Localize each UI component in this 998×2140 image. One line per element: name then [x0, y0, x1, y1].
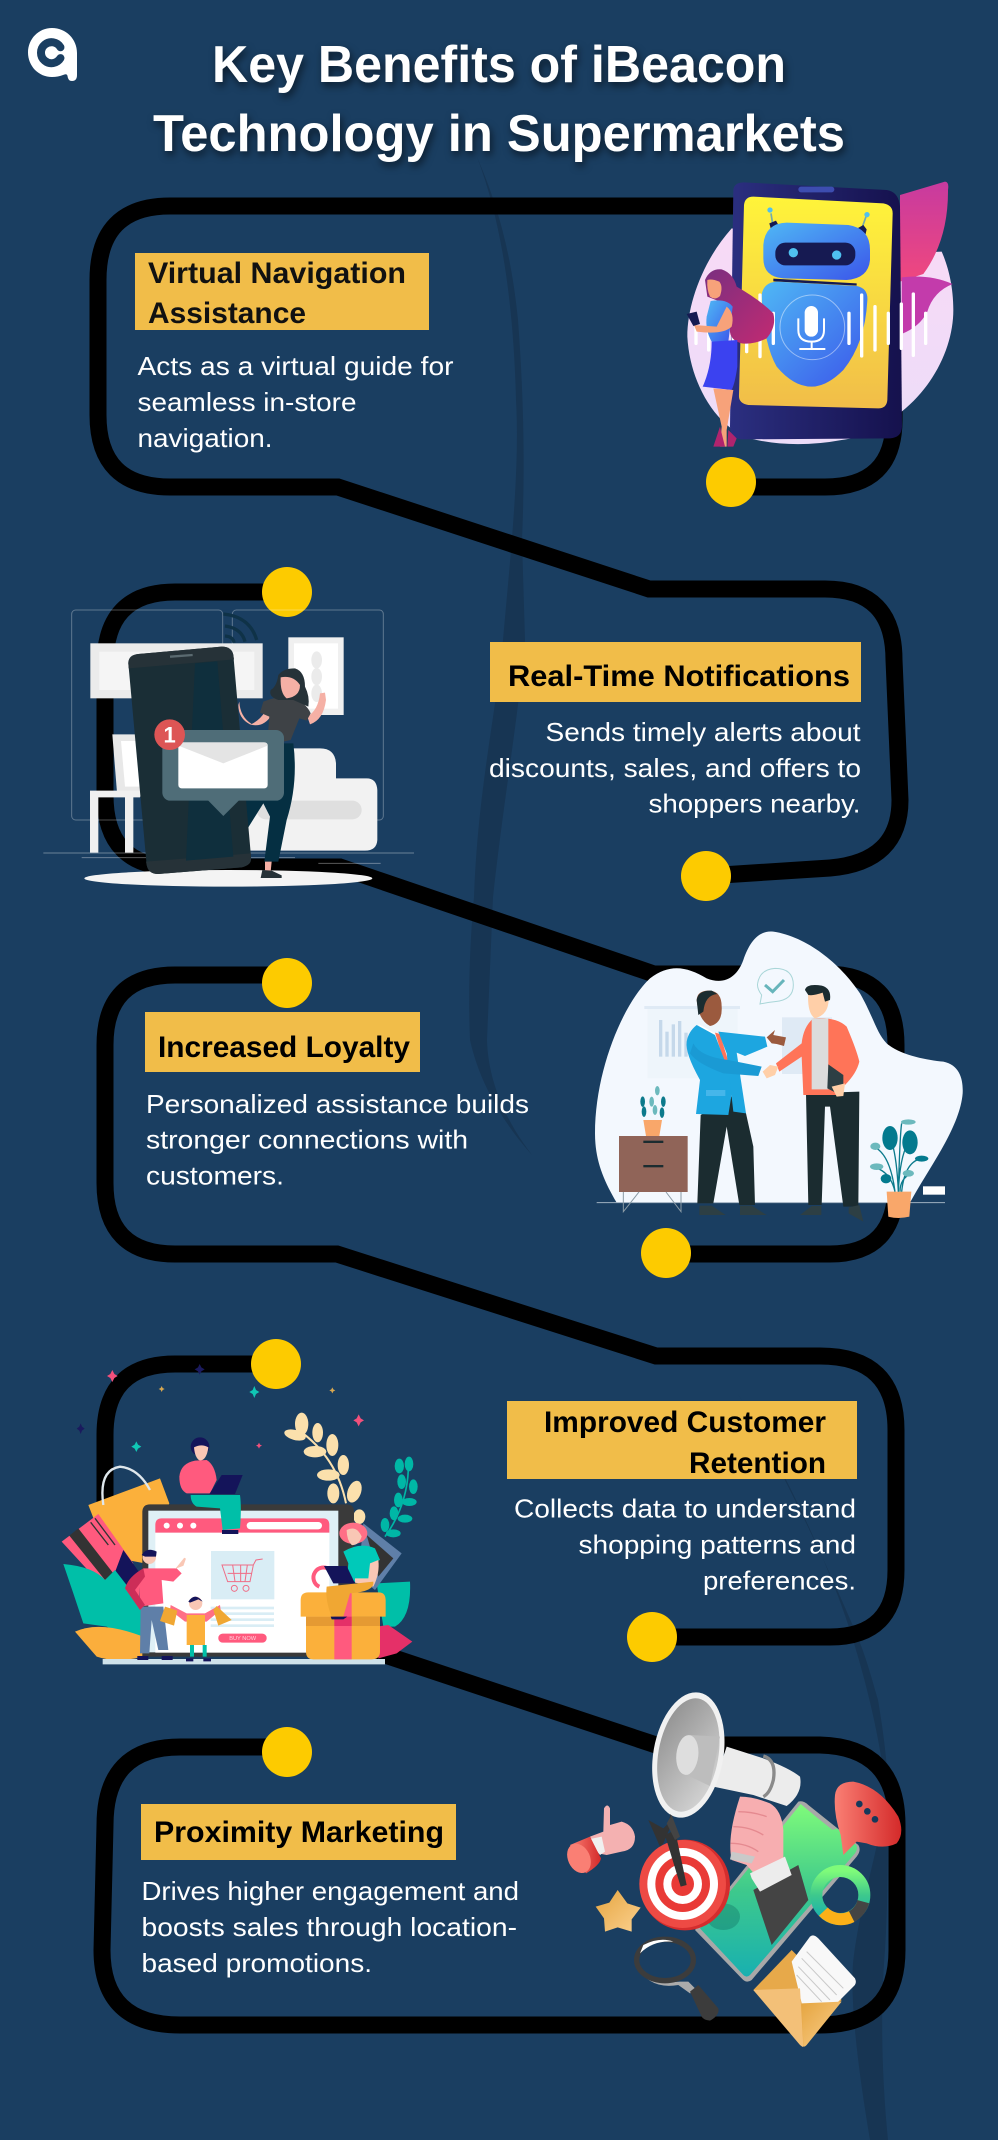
panel: virtual navigation assistance: Acts as a virtual guide for: [138, 351, 454, 381]
panel: real-time notifications: discounts, sales, and offers to: [489, 753, 861, 783]
panel: proximity marketing: Drives higher engagement and: [142, 1876, 519, 1906]
donut chart: [816, 1871, 864, 1919]
child with bags: [160, 1597, 232, 1661]
logo: [28, 28, 77, 81]
star: [596, 1890, 641, 1932]
panel: proximity marketing: [141, 1804, 519, 1978]
panel: improved customer retention: Retention: [689, 1447, 826, 1480]
target and dart: [639, 1814, 730, 1930]
panel: virtual navigation assistance: Assistance: [148, 297, 306, 330]
thumbs up: [563, 1805, 635, 1877]
panel: real-time notifications: shoppers nearby.: [648, 788, 860, 818]
panel: real-time notifications: Real-Time Notifications: [508, 660, 850, 693]
panel: real-time notifications: Sends timely alerts about: [546, 717, 861, 747]
illustration: phone notification and woman: [43, 610, 414, 887]
megaphone: [643, 1687, 801, 1823]
magnifying glass: [637, 1939, 719, 2021]
connector: path from loyalty panel to retention panel: [105, 975, 896, 1637]
panel: virtual navigation assistance: [135, 253, 454, 453]
panel: improved customer retention: Collects data to understand: [514, 1494, 856, 1524]
man waving: [125, 1550, 185, 1660]
panel: improved customer retention: shopping patterns and: [578, 1530, 856, 1560]
panel: increased loyalty: Increased Loyalty: [158, 1031, 410, 1064]
red speech bubble: [835, 1782, 901, 1855]
panel: increased loyalty: stronger connections with: [146, 1124, 468, 1154]
illustration: marketing megaphone and icons: [563, 1687, 901, 2047]
phone with green screen: [695, 1801, 860, 1982]
panel: proximity marketing: based promotions.: [142, 1948, 372, 1978]
panel: improved customer retention: [507, 1401, 857, 1596]
title: Technology in Supermarkets: [153, 105, 845, 163]
title: Key Benefits of iBeacon: [212, 36, 786, 94]
connector: path from retention panel to marketing panel: [102, 1364, 897, 2025]
illustration: phone notification and woman: 1: [164, 723, 176, 748]
connector: black path from panel 1 to notifications panel: [98, 206, 900, 876]
panel: improved customer retention: Improved Customer: [544, 1406, 826, 1439]
connector: panel 1 lower right arc: [731, 380, 894, 487]
yellow connector dots: [251, 457, 756, 1777]
panel: proximity marketing: boosts sales through location-: [142, 1912, 517, 1942]
panel: increased loyalty: [145, 1012, 529, 1190]
connector: path from notifications panel to loyalty panel: [105, 592, 896, 1254]
illustration: business handshake: [595, 931, 963, 1222]
illustration: online shopping laptop: BUY NOW: [229, 1636, 257, 1642]
fist holding megaphone: [730, 1797, 792, 1892]
panel: proximity marketing: Proximity Marketing: [154, 1816, 444, 1849]
man sitting with laptop on screen: [179, 1437, 243, 1534]
panel: virtual navigation assistance: seamless in-store: [138, 387, 356, 417]
panel: improved customer retention: preferences.: [703, 1566, 856, 1596]
panel: increased loyalty: Personalized assistance builds: [146, 1089, 529, 1119]
panel: increased loyalty: customers.: [146, 1160, 284, 1190]
illustration: robot voice assistant on phone: [687, 182, 953, 447]
panel: virtual navigation assistance: navigation.: [138, 423, 272, 453]
title: [153, 36, 845, 163]
illustration: online shopping laptop: [62, 1364, 418, 1664]
envelope with letter: [753, 1935, 856, 2047]
panel: virtual navigation assistance: Virtual Navigation: [148, 257, 406, 290]
panel: real-time notifications: [489, 642, 861, 818]
woman sitting with laptop on gift: [301, 1523, 402, 1659]
